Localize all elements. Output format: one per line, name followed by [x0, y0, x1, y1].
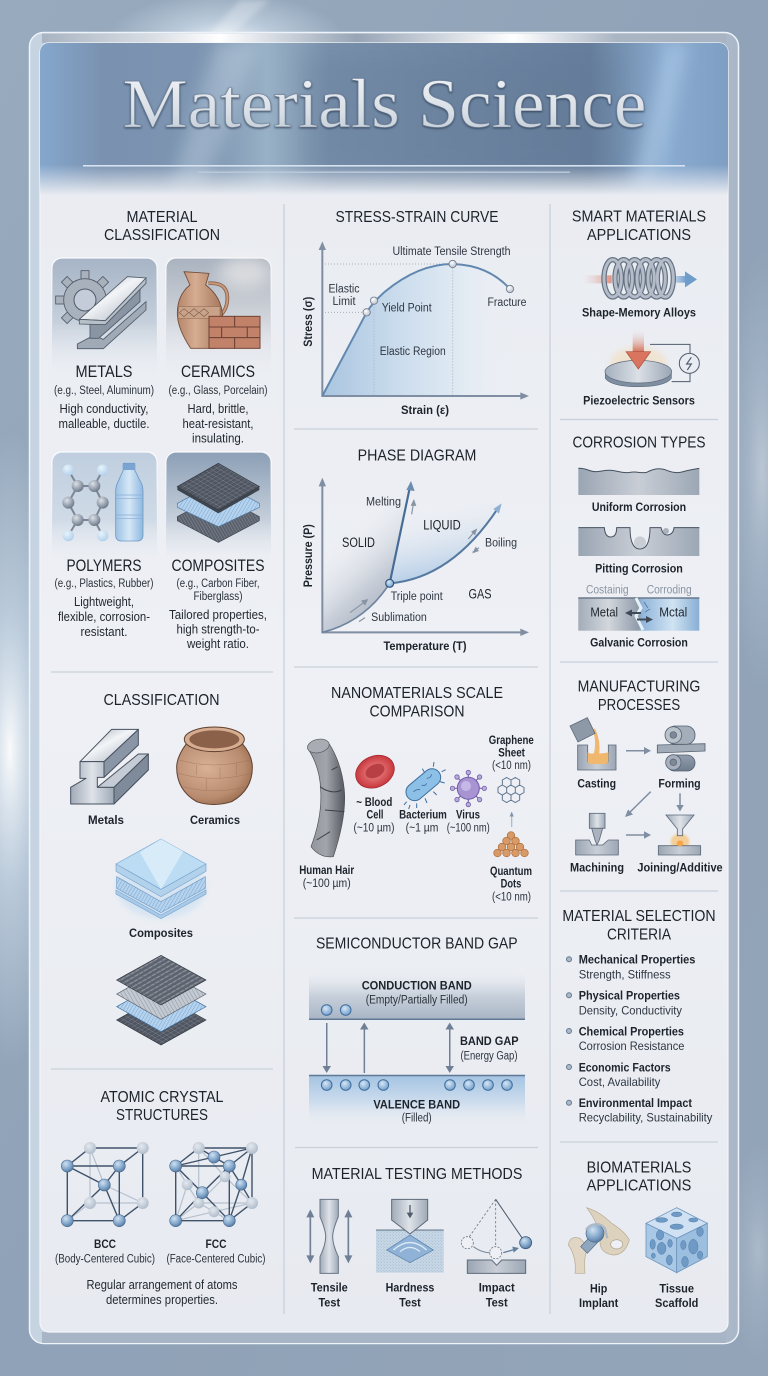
criterion: physical properties: [566, 988, 682, 1017]
label: impact test: [479, 1281, 515, 1310]
label: quantum dots: Dots: [501, 876, 522, 890]
criterion: environmental impact: Environmental Impact: [579, 1096, 692, 1110]
label: band gap: (Energy Gap): [460, 1050, 518, 1062]
card: ceramics: CERAMICS: [181, 362, 255, 381]
conduction band: CONDUCTION BAND: [362, 978, 472, 992]
icon: graphene: [498, 778, 524, 802]
card: polymers: flexible, corrosion-: [58, 610, 150, 624]
label: graphene sheet: Sheet: [498, 746, 525, 760]
heading: smart materials applications: SMART MATERIALS: [572, 209, 706, 226]
label: hip implant: Implant: [579, 1296, 618, 1310]
label: hardness test: Hardness: [386, 1281, 435, 1295]
label: shape-memory alloys: Shape-Memory Alloys: [582, 306, 696, 320]
card: metals: malleable, ductile.: [58, 417, 150, 431]
icon: layered composite stack: [117, 955, 206, 1045]
arrow: graphene to quantum dots: [510, 812, 514, 827]
card: ceramics: heat-resistant,: [182, 417, 254, 431]
criterion: physical properties: Physical Properties: [579, 988, 680, 1002]
heading: corrosion types: CORROSION TYPES: [572, 434, 706, 451]
labels: bcc and fcc: (Face-Centered Cubic): [166, 1254, 266, 1266]
label: blood cell: (~10 µm): [354, 823, 395, 835]
valence band: [309, 1076, 525, 1126]
arrow: forming to joining: [676, 793, 684, 812]
icon: galvanic corrosion: Metal: [590, 606, 618, 620]
label: tissue scaffold: Tissue: [659, 1281, 694, 1295]
panel: manufacturing processes: [570, 679, 723, 875]
heading: atomic crystal structures: STRUCTURES: [116, 1107, 208, 1124]
heading: atomic crystal structures: [100, 1089, 224, 1124]
icon: pitting corrosion: [578, 528, 699, 556]
icon: forming rollers: [657, 726, 705, 771]
panel: biomaterials applications: [568, 1159, 707, 1310]
valence band: VALENCE BAND: [373, 1097, 460, 1111]
label: tensile test: Test: [318, 1296, 340, 1310]
heading: manufacturing processes: PROCESSES: [598, 697, 680, 714]
icon: bcc lattice: [61, 1142, 149, 1227]
card: composites: Fiberglass): [194, 591, 243, 603]
icon: joining and additive: [658, 815, 701, 855]
criterion: physical properties: Density, Conductivity: [579, 1003, 682, 1017]
heading: material selection criteria: [562, 908, 716, 943]
heading: nanomaterials scale comparison: COMPARISON: [370, 704, 464, 721]
chart: stress-strain: [301, 241, 529, 417]
icon: metal i-beam: [71, 729, 148, 804]
label: casting: Casting: [577, 776, 616, 790]
chart: stress-strain: Ultimate Tensile Strength: [392, 246, 510, 258]
panel: phase diagram: [301, 448, 529, 653]
icon: galvanic corrosion: Mctal: [659, 606, 687, 620]
chart: stress-strain: Limit: [332, 296, 356, 308]
card: composites: (e.g., Carbon Fiber,: [176, 578, 260, 590]
label: impact test: Test: [486, 1296, 508, 1310]
heading: material selection criteria: MATERIAL SELECTION: [562, 908, 716, 925]
heading: classification: CLASSIFICATION: [104, 692, 220, 709]
panel: material testing methods: [306, 1166, 532, 1310]
arrow: casting to forming: [626, 747, 651, 754]
card: composites: Tailored properties,: [169, 608, 267, 622]
panel: stress-strain curve: [301, 209, 529, 417]
label: joining/additive: Joining/Additive: [637, 861, 723, 875]
criterion: mechanical properties: Strength, Stiffness: [579, 967, 671, 981]
label: galvanic corrosion: Galvanic Corrosion: [590, 636, 688, 650]
heading: manufacturing processes: MANUFACTURING: [578, 679, 700, 696]
card: composites: high strength-to-: [176, 622, 260, 636]
label: hardness test: [386, 1281, 435, 1310]
label: virus: Virus: [456, 808, 480, 822]
arrow: forming to machining: [625, 792, 651, 817]
panel: corrosion types: [572, 434, 706, 650]
panel: atomic crystal structures: [55, 1089, 266, 1307]
heading: material classification: MATERIAL: [126, 209, 198, 226]
chart: stress-strain: Elastic Region: [380, 346, 446, 358]
icon: piezoelectric sensor: [605, 330, 699, 387]
criterion: chemical properties: [566, 1024, 685, 1053]
icon: galvanic corrosion: [578, 597, 699, 631]
icon: hip implant: [568, 1208, 629, 1273]
labels: bcc and fcc: (Body-Centered Cubic): [55, 1254, 155, 1266]
label: blood cell: [354, 795, 395, 835]
icon: quantum dots: [494, 832, 528, 857]
label: human hair: Human Hair: [299, 863, 354, 877]
card: ceramics: [166, 256, 271, 446]
labels: bcc and fcc: [55, 1237, 266, 1266]
label: hardness test: Test: [399, 1296, 421, 1310]
label: bacterium: [399, 808, 447, 835]
panel: material classification: [52, 209, 271, 651]
criterion: chemical properties: Chemical Properties: [579, 1024, 684, 1038]
chart: stress-strain: Stress (σ): [301, 297, 315, 347]
card: ceramics: insulating.: [192, 432, 244, 446]
heading: smart materials applications: APPLICATIONS: [587, 227, 691, 244]
icon: impact test: [461, 1199, 532, 1273]
label: quantum dots: Quantum: [490, 864, 532, 878]
icon: blue composite block: [116, 839, 206, 919]
label: human hair: [299, 863, 354, 890]
card: metals: (e.g., Steel, Aluminum): [54, 385, 154, 397]
label: metals: Metals: [88, 813, 124, 827]
heading: biomaterials applications: BIOMATERIALS: [587, 1159, 691, 1176]
chart: phase diagram: Melting: [366, 497, 401, 509]
heading: biomaterials applications: [587, 1159, 691, 1195]
panel: semiconductor band gap: [309, 936, 525, 1126]
chart: stress-strain: Elastic: [328, 284, 360, 296]
criterion: environmental impact: [566, 1096, 712, 1125]
conduction band: (Empty/Partially Filled): [366, 994, 468, 1006]
heading: stress-strain curve: STRESS-STRAIN CURVE: [336, 209, 498, 226]
heading: phase diagram: PHASE DIAGRAM: [358, 448, 476, 465]
icon: shape-memory spring: [582, 260, 697, 297]
icon: tensile test: [306, 1199, 352, 1273]
heading: material testing methods: MATERIAL TESTING METHODS: [312, 1166, 522, 1183]
label: pitting corrosion: Pitting Corrosion: [595, 561, 683, 575]
icon: bacterium: [402, 762, 446, 809]
label: blood cell: Cell: [366, 808, 384, 822]
card: metals: METALS: [76, 362, 132, 381]
label: tensile test: Tensile: [311, 1281, 348, 1295]
label: band gap: BAND GAP: [460, 1034, 519, 1048]
label: hip implant: [579, 1281, 618, 1310]
label: graphene sheet: Graphene: [489, 733, 534, 747]
heading: nanomaterials scale comparison: NANOMATERIALS SCALE: [331, 685, 503, 702]
icon: uniform corrosion: [578, 468, 699, 495]
chart: phase diagram: Temperature (T): [384, 639, 466, 653]
arrow: machining to joining: [626, 831, 651, 839]
chart: phase diagram: GAS: [468, 586, 492, 601]
chart: phase diagram: Triple point: [391, 591, 443, 603]
label: piezoelectric sensors: Piezoelectric Sensors: [583, 393, 695, 407]
column dividers: [51, 204, 718, 1314]
criterion: economic factors: Economic Factors: [579, 1060, 671, 1074]
label: tensile test: [311, 1281, 348, 1310]
label: human hair: (~100 µm): [303, 878, 351, 890]
label: band gap: [460, 1034, 519, 1062]
card: metals: [52, 258, 157, 431]
heading: smart materials applications: [572, 209, 706, 244]
label: virus: [447, 808, 490, 835]
criterion: mechanical properties: Mechanical Properties: [579, 952, 696, 966]
chart: phase diagram: Sublimation: [371, 612, 427, 624]
label: graphene sheet: [489, 733, 534, 772]
label: tissue scaffold: [655, 1281, 698, 1310]
heading: semiconductor band gap: SEMICONDUCTOR BAND GAP: [316, 936, 518, 953]
heading: material classification: CLASSIFICATION: [104, 227, 220, 244]
label: quantum dots: (<10 nm): [492, 892, 531, 904]
criterion: chemical properties: Corrosion Resistance: [579, 1039, 685, 1053]
criterion: mechanical properties: [566, 952, 696, 981]
valence band: (Filled): [402, 1113, 432, 1125]
heading: biomaterials applications: APPLICATIONS: [587, 1178, 691, 1195]
label: ceramics: Ceramics: [190, 813, 240, 827]
icon: human hair: [306, 737, 345, 857]
label: bacterium: Bacterium: [399, 808, 447, 822]
label: graphene sheet: (<10 nm): [492, 760, 531, 772]
note: atom arrangement: Regular arrangement of atoms: [86, 1278, 238, 1292]
label: tissue scaffold: Scaffold: [655, 1296, 698, 1310]
label: bacterium: (~1 µm: [406, 823, 438, 835]
heading: manufacturing processes: [578, 679, 700, 714]
conduction band: [309, 970, 525, 1019]
label: hip implant: Hip: [590, 1281, 607, 1295]
panel: nanomaterials scale comparison: [299, 685, 534, 904]
label: impact test: Impact: [479, 1281, 515, 1295]
card: composites: weight ratio.: [186, 637, 249, 651]
icon: fcc lattice: [170, 1142, 258, 1227]
heading: material selection criteria: CRITERIA: [607, 926, 671, 943]
panel: material selection criteria: [562, 908, 716, 1125]
note: atom arrangement: [86, 1278, 238, 1307]
arrows: electron transitions: [322, 1022, 454, 1073]
chart: phase diagram: Pressure (P): [301, 524, 315, 587]
criterion: economic factors: Cost, Availability: [579, 1075, 660, 1089]
label: forming: Forming: [658, 776, 701, 790]
labels: galvanic pair: Costainig: [586, 584, 629, 596]
chart: stress-strain: Fracture: [488, 297, 526, 309]
labels: bcc and fcc: BCC: [94, 1237, 116, 1251]
card: composites: [166, 452, 271, 651]
card: composites: COMPOSITES: [172, 556, 264, 575]
chart: phase diagram: Boiling: [485, 538, 517, 550]
card: metals: High conductivity,: [60, 402, 148, 416]
labels: bcc and fcc: FCC: [206, 1237, 227, 1251]
labels: galvanic pair: [586, 584, 692, 596]
icon: ceramic pot: [177, 727, 252, 804]
header rules: [83, 165, 685, 173]
labels: galvanic pair: Corroding: [647, 584, 692, 596]
card: polymers: Lightweight,: [74, 595, 134, 609]
note: atom arrangement: determines properties.: [106, 1293, 218, 1307]
card: ceramics: (e.g., Glass, Porcelain): [168, 385, 268, 397]
label: uniform corrosion: Uniform Corrosion: [592, 500, 686, 514]
label: machining: Machining: [570, 861, 624, 875]
icon: casting: [570, 718, 616, 770]
card: polymers: resistant.: [80, 625, 128, 639]
panel: smart materials applications: [572, 209, 706, 407]
card: polymers: POLYMERS: [66, 556, 142, 575]
chart: phase diagram: SOLID: [342, 535, 375, 550]
label: virus: (~100 nm): [447, 823, 490, 835]
card: polymers: [52, 452, 157, 639]
chart: stress-strain: Yield Point: [382, 303, 432, 315]
title: Materials Science: [122, 66, 646, 143]
heading: nanomaterials scale comparison: [331, 685, 503, 721]
heading: atomic crystal structures: ATOMIC CRYSTAL: [100, 1089, 224, 1106]
chart: phase diagram: LIQUID: [423, 517, 461, 532]
header banner: [40, 43, 728, 195]
heading: material classification: [104, 209, 220, 244]
icon: hardness test: [376, 1199, 444, 1273]
icon: tissue scaffold: [646, 1208, 707, 1273]
card: polymers: (e.g., Plastics, Rubber): [54, 578, 154, 590]
icon: machining: [576, 813, 618, 855]
label: quantum dots: [490, 864, 532, 904]
icon: virus: [450, 770, 486, 807]
label: blood cell: ~ Blood: [356, 795, 392, 809]
label: composites: Composites: [129, 926, 193, 940]
card: ceramics: Hard, brittle,: [188, 402, 248, 416]
criterion: environmental impact: Recyclability, Sustainability: [579, 1111, 712, 1125]
criterion: economic factors: [566, 1060, 671, 1089]
chart: phase diagram: [301, 478, 529, 653]
icon: blood cell: [350, 749, 400, 794]
chart: stress-strain: Strain (ε): [401, 403, 449, 417]
panel: classification: [71, 692, 252, 1045]
